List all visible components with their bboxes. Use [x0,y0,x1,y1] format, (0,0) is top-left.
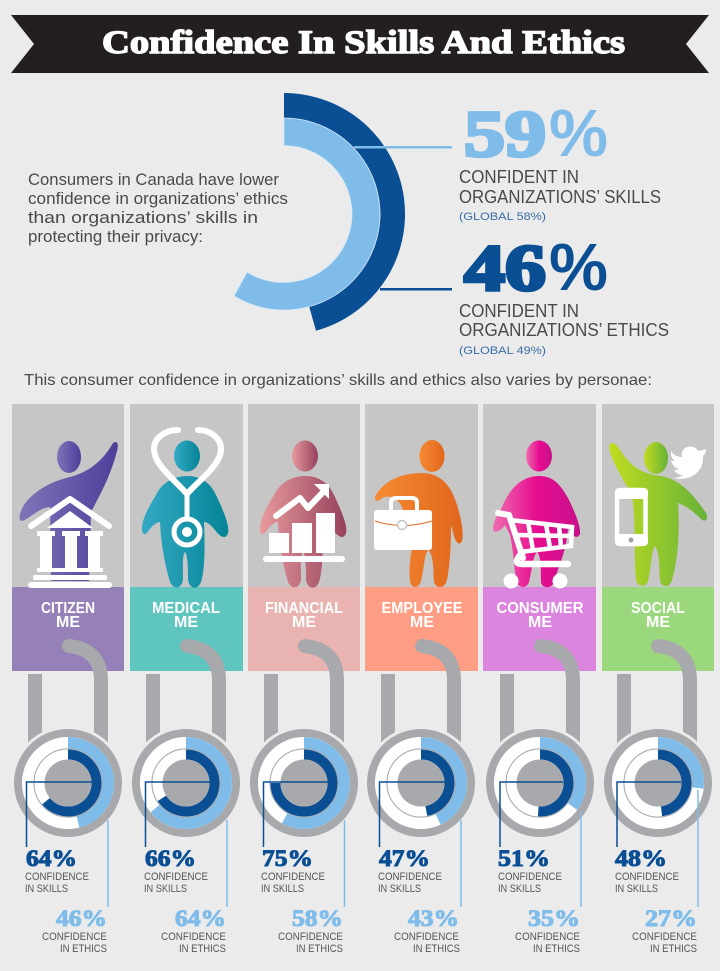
stat: ethics: 43% [408,906,459,931]
shackle [507,646,573,745]
stat: ethics: 35% [528,906,580,931]
stat: skills [378,846,442,895]
stat: ethics 46%: ORGANIZATIONS’ ETHICS [459,319,669,340]
panel: citizen me [12,404,124,671]
stat: ethics: IN ETHICS [650,943,697,955]
stat: ethics: IN ETHICS [296,943,343,955]
panel: consumer me [483,404,596,671]
icon: medical figure with stethoscope [142,430,228,588]
label: ME [292,614,316,631]
stat: ethics [42,906,107,955]
stat: skills [498,846,562,895]
stat: ethics: CONFIDENCE [515,931,580,943]
stat: ethics: CONFIDENCE [278,931,343,943]
icon: employee figure with briefcase [374,440,463,587]
stat: skills [144,846,208,895]
title banner [11,15,709,73]
stat: ethics 46%: (GLOBAL 49%) [459,345,546,357]
shackle [388,646,454,745]
stat: ethics: CONFIDENCE [394,931,459,943]
lock: social 48 / 27 [601,646,715,955]
stat: ethics: IN ETHICS [533,943,580,955]
stat: skills: IN SKILLS [615,883,658,895]
stat: skills: 64% [26,846,77,871]
stat: ethics [632,906,697,955]
stat: skills: CONFIDENCE [25,871,89,883]
stat: skills 59%: (GLOBAL 58%) [459,211,546,223]
intro text: confidence in organizations’ ethics [28,190,288,208]
label: FINANCIAL [265,600,343,617]
label: ME [56,614,80,631]
label: CITIZEN [41,600,95,617]
stat: ethics [161,906,226,955]
stat: skills 59%: % [549,96,608,171]
stat: skills [25,846,89,895]
label: ME [646,614,670,631]
arc: skills 59% [234,118,380,310]
stat: ethics: CONFIDENCE [632,931,697,943]
title: Confidence In Skills And Ethics [102,25,625,61]
icon: financial figure with chart [260,440,346,588]
stat: skills 59%: ORGANIZATIONS’ SKILLS [459,186,661,207]
intro text: than organizations’ skills in [28,209,258,227]
stat: ethics: 27% [645,906,697,931]
stat: ethics: IN ETHICS [179,943,226,955]
stat: skills: 47% [379,846,430,871]
lock: consumer 51 / 35 [483,646,597,955]
stat: ethics [278,906,343,955]
stat: ethics: 64% [175,906,226,931]
connector: skills [354,146,452,148]
stat: skills: CONFIDENCE [378,871,442,883]
stat: skills: IN SKILLS [25,883,68,895]
stat: skills: CONFIDENCE [144,871,208,883]
large donut chart [234,93,405,331]
icon: citizen figure with bank [19,441,118,588]
label: ME [528,614,552,631]
stat: ethics 46%: 46 [464,232,546,305]
label: ME [174,614,198,631]
stat: skills: CONFIDENCE [615,871,679,883]
shackle [153,646,219,745]
shackle [35,646,101,745]
label: EMPLOYEE [382,600,463,617]
stat: ethics 46%: % [549,230,608,305]
stat: skills 59%: CONFIDENT IN [459,166,579,187]
stat: skills: CONFIDENCE [498,871,562,883]
stat: skills: CONFIDENCE [261,871,325,883]
stat: ethics: IN ETHICS [413,943,460,955]
stat: skills [261,846,325,895]
stat: ethics: CONFIDENCE [42,931,107,943]
stat: skills: 75% [262,846,313,871]
stat: ethics 46%: CONFIDENT IN [459,300,579,321]
shackle [271,646,337,745]
connector: ethics [380,288,452,290]
stat: ethics: 46% [56,906,107,931]
panel: social me [602,404,714,671]
stat: ethics: CONFIDENCE [161,931,226,943]
stat: skills: IN SKILLS [144,883,187,895]
stat: ethics [515,906,580,955]
stat: ethics: 58% [292,906,343,931]
stat: ethics 46% [459,230,669,357]
panel: medical me [130,404,243,671]
label: CONSUMER [496,600,584,617]
stat: ethics [394,906,460,955]
panel: employee me [365,404,478,671]
lock: financial 75 / 58 [247,646,361,955]
label: MEDICAL [152,600,220,617]
icon: social figure with phone and bird [609,442,707,586]
intro text: Consumers in Canada have lower [28,171,279,189]
label: SOCIAL [631,600,685,617]
panel: financial me [248,404,360,671]
stat: skills: 51% [498,846,550,871]
stat: skills: IN SKILLS [261,883,304,895]
lock: citizen 64 / 46 [11,646,125,955]
lock: employee 47 / 43 [364,646,478,955]
intro text: protecting their privacy: [28,228,203,246]
stat: skills: 66% [145,846,196,871]
stat: skills: 48% [615,846,667,871]
stat: skills 59%: 59 [464,98,546,171]
arc: ethics 46% [284,93,405,331]
stat: skills [615,846,679,895]
lock: medical 66 / 64 [129,646,243,955]
label: ME [410,614,434,631]
icon: consumer figure with cart [493,440,580,588]
stat: ethics: IN ETHICS [60,943,107,955]
stat: skills: IN SKILLS [378,883,421,895]
subheading: This consumer confidence in organizations’ skills and ethics also varies by personae: [24,372,652,389]
shackle [624,646,690,745]
stat: skills: IN SKILLS [498,883,541,895]
stat: skills 59% [459,96,661,223]
